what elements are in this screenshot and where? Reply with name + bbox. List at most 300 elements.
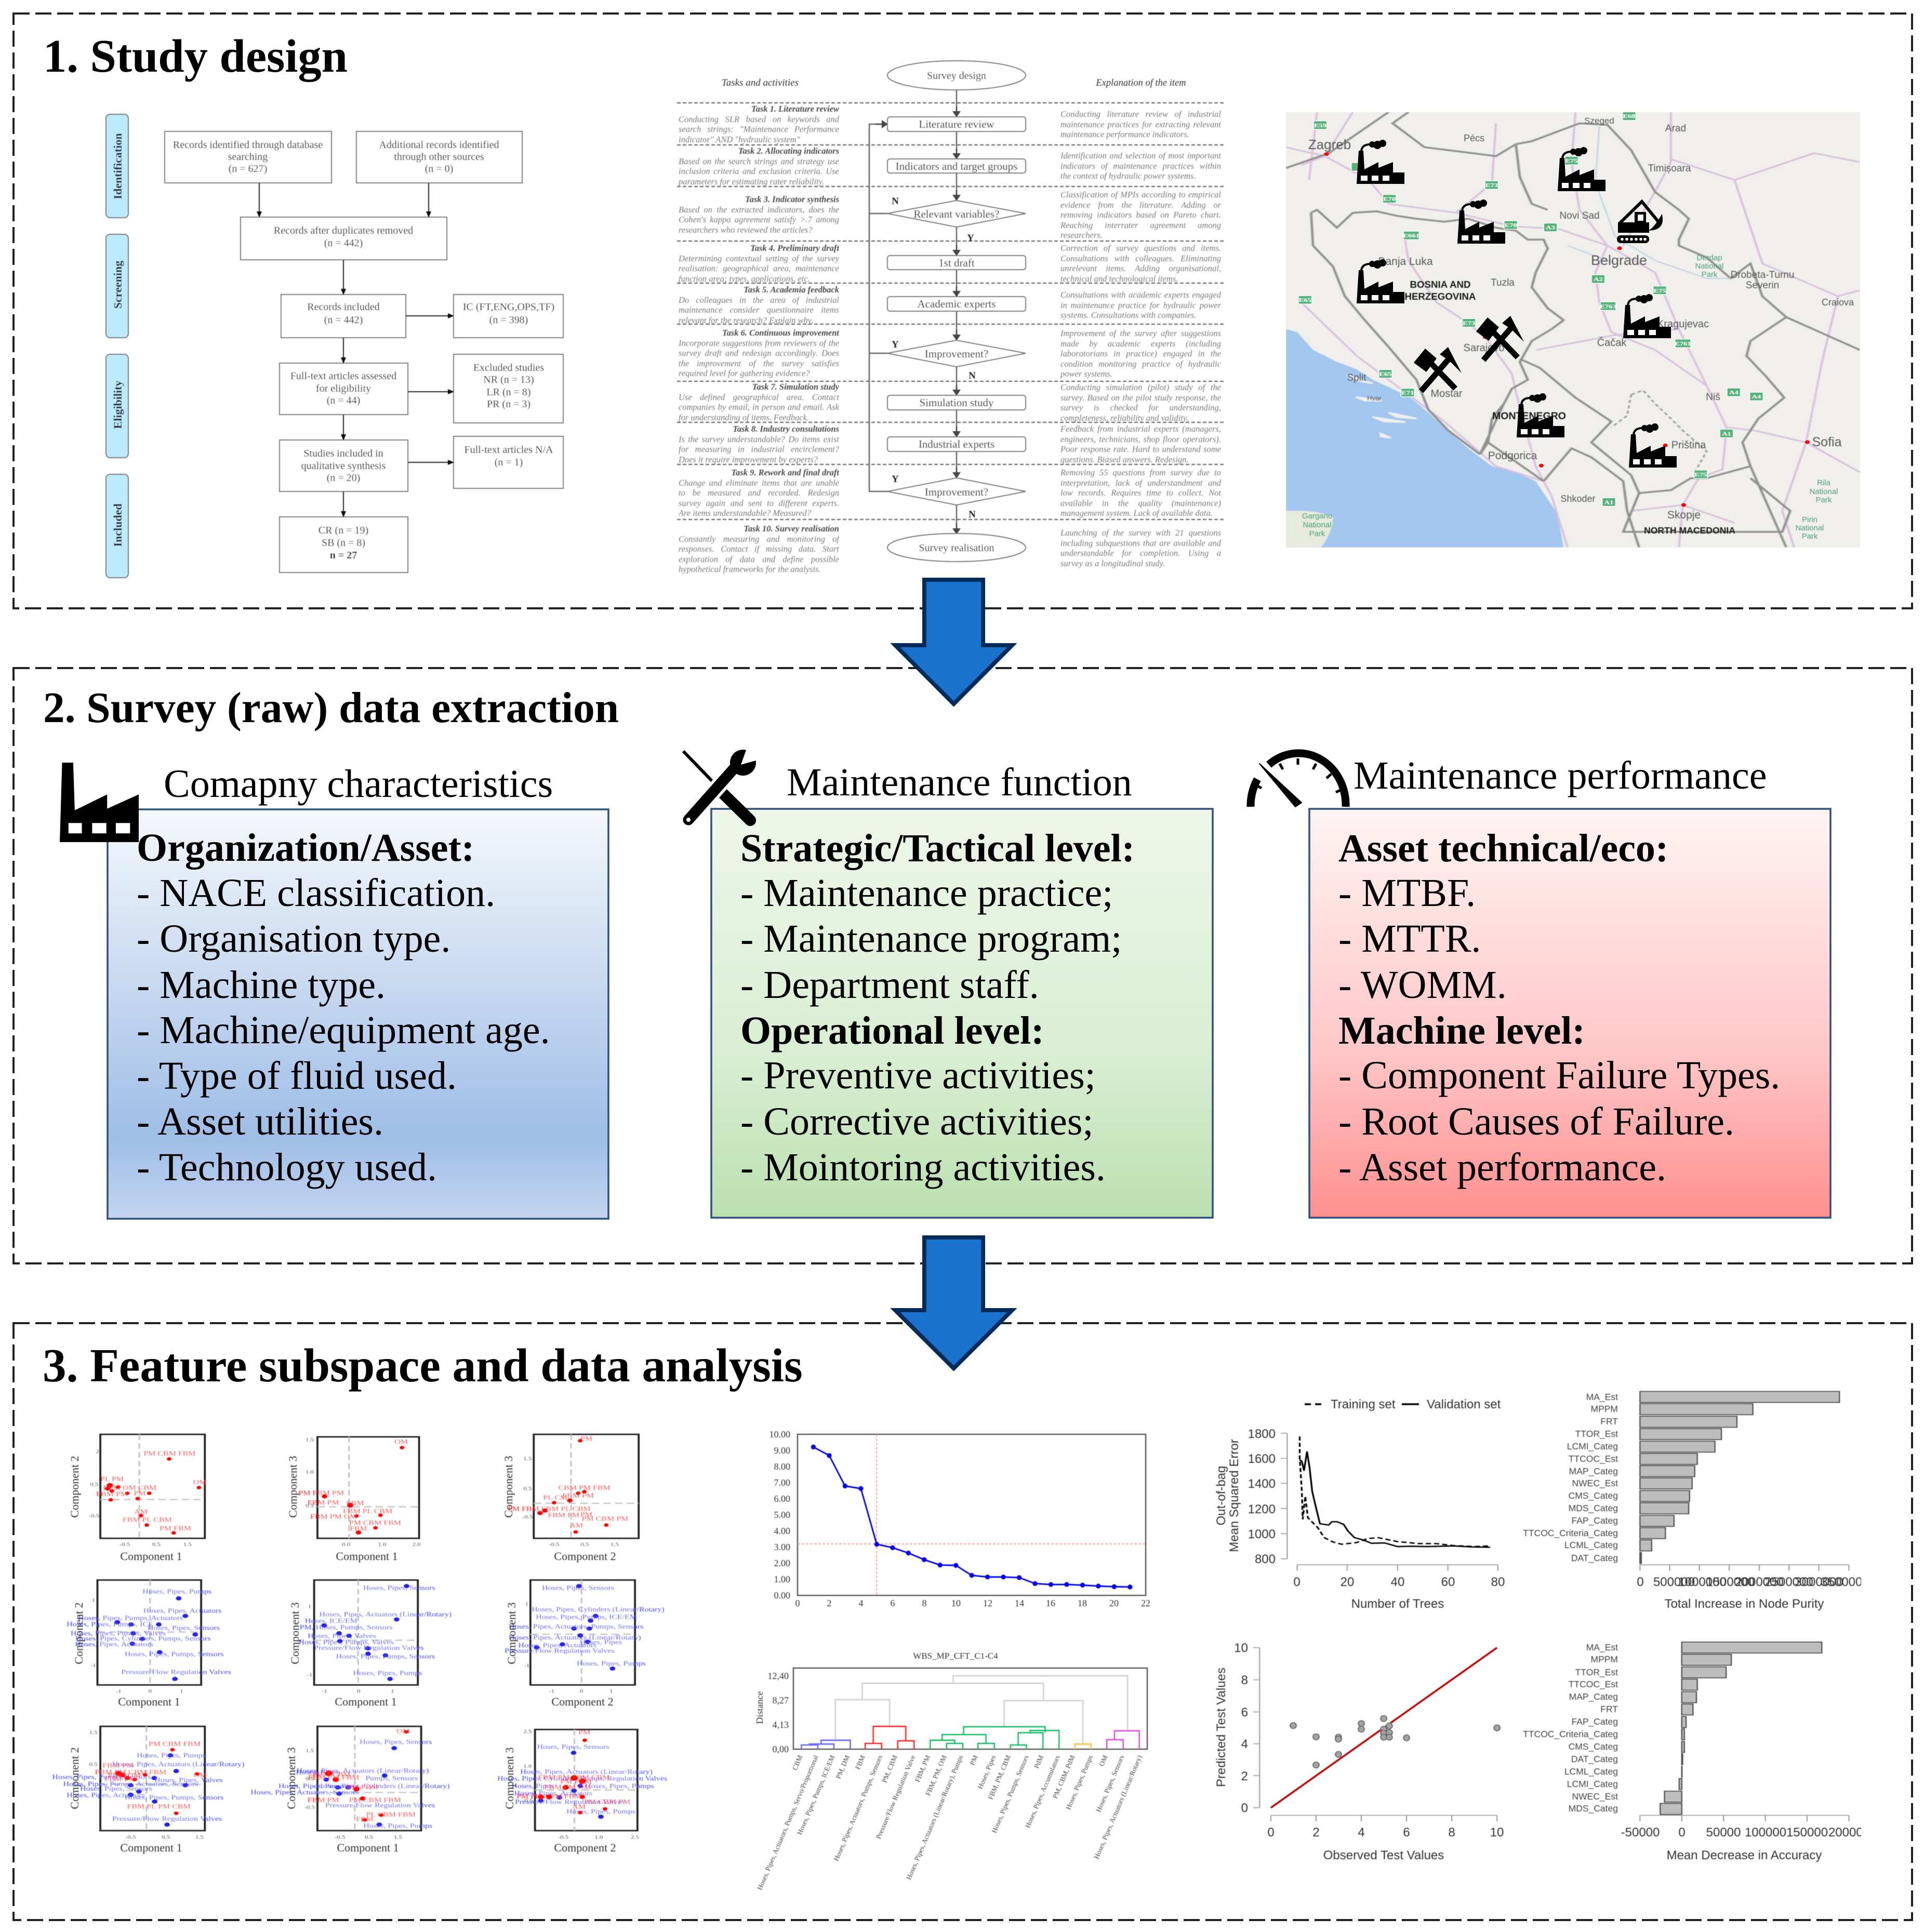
text: task 10: Constantly measuring and monitoring of	[679, 534, 839, 544]
arrows: flow connectors	[956, 90, 957, 534]
arrow: feedback loop	[869, 124, 887, 491]
chart: scree plot of eigenvalues: 2	[827, 1598, 831, 1608]
scatter plot: blue, component 1 vs 2: Hoses, Pipes, Sensors	[148, 1624, 220, 1632]
text: task 7	[679, 382, 839, 422]
axis labels: component titles: Component 2	[554, 1841, 616, 1854]
chart: scree plot of eigenvalues: 9.00	[774, 1445, 790, 1456]
node: Simulation study: Simulation study	[920, 396, 994, 409]
text: explanation 4: Correction of survey questions and items.	[1060, 243, 1221, 253]
scatter plot: blue, component 1 vs 2: Hoses, Pipes, Pumps, Valves	[71, 1630, 166, 1637]
legend: training and validation set	[1305, 1397, 1501, 1411]
chart: out-of-bag error line chart: 1600	[1248, 1452, 1276, 1466]
chart: observed versus predicted scatter plot: 6	[1241, 1706, 1248, 1720]
chart: observed versus predicted scatter plot: 0	[1241, 1801, 1248, 1815]
chart: total increase in node purity bar chart: MA_Est	[1586, 1392, 1618, 1403]
map: place names: MONTENEGRO	[1492, 410, 1566, 422]
text: task 2: Based on the search strings and strategy use	[679, 156, 839, 166]
dendrogram leaf labels: OM	[1097, 1754, 1109, 1767]
heading: 3. Feature subspace and data analysis: 3. Feature subspace and data analysis	[43, 1339, 803, 1392]
map: road signs: A3	[1546, 224, 1555, 231]
scatter plot: red, component 1 vs 3: FBM PL CBM	[343, 1508, 393, 1515]
node: Survey realisation: Survey realisation	[919, 542, 994, 554]
map: road signs	[1298, 112, 1763, 506]
scatter plot: red, component 2 vs 3: PM	[580, 1435, 593, 1443]
axis labels: component titles: Component 1	[335, 1695, 397, 1708]
scatter plot: blue, component 1 vs 2	[67, 1580, 231, 1694]
text: explanation 1: Conducting literature review of industrial	[1060, 109, 1221, 119]
chart: scree plot of eigenvalues: 3.00	[774, 1542, 790, 1552]
scatter plot: red, component 1 vs 2: PM FBM	[160, 1525, 191, 1532]
chart: mean decrease in accuracy bar chart: TTCOC_Est	[1569, 1679, 1618, 1690]
chart: scree plot of eigenvalues: 4.00	[774, 1526, 790, 1536]
list: organization and asset items: - Asset utilities.	[137, 1100, 383, 1143]
scatter plot: combined, component 1 vs 2: 0.5	[89, 1762, 98, 1767]
dendrogram leaf labels: Hoses, Pipes, Pumps, Sensors	[990, 1754, 1030, 1834]
scatter plot: blue, component 1 vs 2: Hoses, Pipes, Actuators	[75, 1641, 153, 1648]
heading: Maintenance function: Maintenance function	[787, 761, 1132, 804]
text: task 1: search strings: "Maintenance Performance	[679, 124, 839, 134]
scatter plot: combined, component 2 vs 3: AM	[572, 1804, 586, 1810]
column heading: Explanation of the item: Explanation of the item	[1095, 78, 1186, 88]
chart: observed versus predicted scatter plot: 10	[1234, 1641, 1248, 1655]
dendrogram leaf labels: CBM	[791, 1754, 804, 1771]
text: explanation 5: systems. Consultations with companies.	[1060, 310, 1197, 320]
chart: observed versus predicted scatter plot: Observed Test Values	[1323, 1848, 1444, 1862]
scatter plot: blue, component 2 vs 3: 1	[525, 1602, 528, 1607]
node: Academic experts	[887, 297, 1026, 311]
scatter plot: blue, component 1 vs 2: Hoses, Pipes, Actuators	[143, 1607, 221, 1615]
map: road signs: E763	[1600, 303, 1616, 310]
chart: total increase in node purity bar chart: TTOR_Est	[1575, 1429, 1618, 1440]
scatter plot: red, component 1 vs 2: OM	[193, 1479, 207, 1486]
list: strategic, tactical and operational items: - Maintenance program;	[740, 917, 1122, 961]
map: place names: Podgorica	[1488, 450, 1537, 462]
list: strategic, tactical and operational items: Operational level:	[740, 1009, 1044, 1052]
icon: excavator on map	[1617, 202, 1662, 243]
map: road signs: E65	[1299, 297, 1311, 303]
scatter plot: combined, component 2 vs 3: Hoses, Pipes, Actuators	[514, 1790, 592, 1797]
list: asset and machine level items: - Component Failure Types.	[1338, 1054, 1780, 1097]
list: asset and machine level items: Machine level:	[1338, 1009, 1585, 1052]
chart: observed versus predicted scatter plot: Predicted Test Values	[1214, 1668, 1228, 1787]
decision: Improvement?: Improvement?	[925, 348, 988, 360]
phase label: Eligibility	[106, 354, 128, 458]
map: road signs: E661	[1403, 233, 1419, 239]
scatter plot: red, component 1 vs 2	[89, 1434, 207, 1548]
dendrogram leaf labels: FBM	[854, 1754, 867, 1770]
text: explanation 9: interpretation, lack of understandment and	[1060, 478, 1221, 488]
scatter plot: combined, component 1 vs 3: -0.5	[304, 1805, 315, 1810]
dendrogram leaf labels: FBM, PM, CBM	[986, 1754, 1012, 1801]
scatter plot: combined, component 2 vs 3: Hoses, Pipes, Actuators (Linear/Rotary)	[520, 1768, 653, 1776]
map: place names: Park	[1702, 270, 1718, 279]
chart: mean decrease in accuracy bar chart: CMS_Categ	[1569, 1741, 1618, 1752]
node: Survey design	[887, 61, 1026, 90]
dendrogram leaf labels: Hoses, Pipes, Actuators (Linear/Rotary), Pumps	[905, 1754, 964, 1881]
chart: total increase in node purity bar chart: 0	[1637, 1575, 1644, 1589]
chart: out-of-bag error line chart: 1400	[1248, 1477, 1276, 1491]
scatter plot: red, component 2 vs 3: FBM PM	[562, 1493, 594, 1499]
text: explanation 9: low records. Requires time to collect. Not	[1060, 488, 1221, 498]
branch labels: Y and N	[892, 196, 976, 520]
map: place names	[1302, 116, 1854, 541]
map: road signs: E75	[1565, 158, 1578, 164]
text: explanation 7: Conducting simulation (pilot) study of the	[1060, 382, 1221, 392]
map: place names: Sofia	[1812, 435, 1842, 449]
list: organization and asset items: - NACE classification.	[137, 871, 495, 915]
text: task 1	[679, 104, 840, 144]
dendrogram leaf labels: PM, CBM, PdM	[1051, 1754, 1077, 1800]
chart: total increase in node purity bar chart: 3000000	[1795, 1575, 1843, 1589]
box: records after duplicates removed	[241, 217, 447, 260]
scatter plot: combined, component 2 vs 3: 1.0	[595, 1835, 603, 1840]
map: place names: Szeged	[1584, 116, 1614, 126]
scatter plot: blue, component 1 vs 2: 0	[149, 1689, 152, 1694]
node: Indicators and target groups: Indicators and target groups	[896, 160, 1017, 172]
chart: out-of-bag error line chart: 0	[1293, 1575, 1301, 1589]
scatter plot: combined, component 1 vs 2: Hoses, Pipes, Actuators (Linear/Rotary)	[112, 1761, 245, 1768]
node: Literature review	[887, 117, 1026, 131]
text: explanation 3: Classification of MPIs according to empirical	[1060, 190, 1221, 199]
axis labels: component titles: Component 1	[120, 1550, 182, 1563]
arrows: flow connectors	[259, 183, 454, 517]
box: included totals: n = 27	[330, 550, 357, 561]
box: excluded studies: Excluded studies	[473, 362, 544, 374]
scatter plot: combined, component 2 vs 3: 2.5	[523, 1729, 532, 1735]
scatter plot: red, component 1 vs 2: PL PM	[100, 1476, 124, 1483]
text: explanation 5: Consultations with academic experts engaged	[1060, 290, 1221, 300]
chart: scree plot of eigenvalues	[769, 1429, 1150, 1608]
scatter plot: red, component 2 vs 3: 1.5	[523, 1456, 532, 1461]
scatter plot: combined, component 1 vs 2: 0.5	[162, 1835, 170, 1840]
heading: Comapny characteristics: Comapny characteristics	[164, 762, 553, 806]
text: task 5	[679, 285, 840, 325]
text: task 8: Is the survey understandable? Do items exist	[679, 434, 839, 444]
text: explanation 3: evidence from the literature. Adding or	[1060, 200, 1221, 210]
text: explanation 7: completeness, reliability and validity.	[1060, 413, 1188, 423]
scatter plot: blue, component 1 vs 3: Pressure/Flow Regulation Valves	[314, 1645, 424, 1652]
list: asset and machine level items: - MTTR.	[1338, 917, 1481, 961]
scatter plot: blue, component 1 vs 2: Hoses, Pipes, Pumps	[142, 1588, 211, 1595]
chart: scree plot of eigenvalues: 16	[1046, 1598, 1055, 1608]
box: records identified through database	[165, 131, 331, 183]
chart: total increase in node purity bar chart: LCMI_Categ	[1567, 1441, 1618, 1452]
scatter plot: red, component 2 vs 3: AM	[570, 1522, 583, 1529]
box: full-text articles assessed: Full-text articles assessed	[290, 370, 396, 382]
chart: total increase in node purity bar chart: 500000	[1653, 1575, 1695, 1589]
scatter plot: combined, component 1 vs 3: 1.5	[306, 1748, 314, 1754]
scatter plot: combined, component 1 vs 2: Hoses, Pipes, Actuators	[67, 1792, 145, 1799]
box: included totals: CR (n = 19)	[319, 525, 368, 536]
chart: mean decrease in accuracy bar chart: 100000	[1745, 1826, 1786, 1840]
text: task 4: function area; types, applications, etc.	[679, 274, 810, 284]
node: Simulation study	[887, 395, 1026, 410]
scatter plot: blue, component 1 vs 3: Hoses, Pipes, Pumps	[353, 1670, 422, 1677]
chart: total increase in node purity bar chart: 2500000	[1764, 1575, 1813, 1589]
text: explanation 10	[1060, 528, 1221, 568]
scatter plot: red, component 2 vs 3: 1.5	[611, 1542, 619, 1548]
scatter plot: combined, component 1 vs 3: OM	[396, 1728, 410, 1735]
map: road signs: E65	[1379, 371, 1392, 377]
scatter plot: blue, component 1 vs 2: -1	[116, 1689, 122, 1694]
scatter plot: red, component 1 vs 2: FBM PM	[96, 1491, 128, 1498]
scatter plot: blue, component 2 vs 3: -1	[524, 1663, 529, 1668]
chart: scree plot of eigenvalues: 14	[1015, 1598, 1024, 1608]
text: task 8: Does it require improvement by experts?	[679, 455, 818, 464]
scatter plot: red, component 2 vs 3: PL CM	[543, 1495, 568, 1502]
scatter plot: blue, component 2 vs 3: Hoses, Pipes, Actuators	[519, 1642, 596, 1649]
chart: total increase in node purity bar chart: 3500000	[1821, 1575, 1869, 1589]
map: place names: Arad	[1665, 123, 1686, 134]
scatter plot: combined, component 1 vs 2: FBM PM CBM FBM	[95, 1769, 167, 1776]
scatter plot: blue, component 2 vs 3: -1	[549, 1689, 554, 1694]
scatter plot: red, component 1 vs 2: 0.5	[90, 1482, 99, 1487]
chart: scree plot of eigenvalues: 20	[1109, 1598, 1119, 1608]
map: road signs: A4	[1729, 390, 1739, 396]
chart: observed versus predicted scatter plot: 2	[1312, 1826, 1320, 1840]
chart: out-of-bag error line chart: 60	[1441, 1575, 1455, 1589]
scatter plot: combined, component 1 vs 2: Hoses, Pipes, Pumps, Sensors	[52, 1774, 151, 1781]
scatter plot: blue, component 1 vs 2: Hoses, Pipes, Pumps, Actuators	[78, 1615, 183, 1622]
axis labels: component titles: Component 1	[336, 1550, 398, 1563]
decision: Improvement? second: Improvement?	[925, 486, 988, 498]
list: organization and asset items	[137, 826, 550, 1189]
chart: out-of-bag error line chart	[1214, 1397, 1505, 1611]
dendrogram leaf labels: Hoses, Pipes, Pumps, ICE/EM	[795, 1754, 836, 1836]
map: road signs: A1	[1604, 499, 1613, 505]
text: explanation 4: technical and technological items.	[1060, 274, 1178, 284]
text: explanation 10: understandable for completion. Using a	[1060, 548, 1221, 558]
box: excluded studies	[454, 354, 563, 423]
scatter plot: red, component 1 vs 3: OM	[394, 1438, 408, 1446]
scatter plot: blue, component 2 vs 3: Pressure/Flow Regulation Valves	[505, 1647, 615, 1655]
scatter plot: red, component 1 vs 2: FBM PL CBM	[123, 1516, 172, 1524]
scatter plot: red, component 1 vs 3: FBM	[350, 1525, 367, 1533]
panel: survey raw data extraction	[14, 668, 1912, 1263]
scatter plot: red, component 1 vs 3: PM CBM FBM	[349, 1520, 401, 1527]
list: asset and machine level items: Asset technical/eco:	[1338, 827, 1668, 870]
map: place names: Derdap	[1696, 254, 1722, 262]
chart: total increase in node purity bar chart: CMS_Categ	[1569, 1490, 1618, 1501]
chart: total increase in node purity bar chart: 1500000	[1706, 1575, 1755, 1589]
scatter plot: combined, component 1 vs 2: Hoses, Pipes, Valves	[154, 1777, 223, 1784]
dendrogram leaf labels: Hoses, Pipes, Actuators, Pumps, Sensors	[832, 1754, 884, 1862]
axis labels: component titles: Component 3	[505, 1602, 518, 1664]
list: organization and asset items: - Machine/equipment age.	[137, 1008, 550, 1052]
text: explanation 2	[1060, 151, 1221, 181]
text: task 6: the improvement of the survey satisfies	[679, 358, 839, 368]
text: explanation 5: in maintenance practice for hydraulic power	[1060, 300, 1221, 310]
list: organization and asset items: Organization/Asset:	[137, 826, 474, 870]
chart: scree plot of eigenvalues: 7.00	[774, 1477, 790, 1488]
scatter plot: blue, component 2 vs 3	[505, 1580, 665, 1694]
scatter plot: combined, component 1 vs 3: Hoses, Pipes, Sensors	[360, 1739, 432, 1746]
text: task 9: survey again and sent to different experts.	[679, 498, 839, 508]
scatter plot: combined, component 1 vs 3: FBM CBM	[313, 1771, 351, 1778]
box: records identified through database: searching	[228, 151, 268, 163]
text: task 9: Are items understandable? Measured?	[679, 508, 811, 518]
chart: dendrogram WBS_MP_CFT_C1-C4: WBS_MP_CFT_C1-C4	[913, 1651, 998, 1661]
scatter plot: blue, component 1 vs 2: Hoses, Pipes, Pumps, Sensors	[125, 1651, 223, 1658]
map: place names: Pécs	[1464, 133, 1484, 143]
chart: dendrogram WBS_MP_CFT_C1-C4: 0,00	[772, 1744, 789, 1754]
map: place names: Park	[1816, 496, 1832, 504]
text: explanation 8: questions. Biased answers. Redesign.	[1060, 455, 1189, 464]
text: explanation 4	[1060, 243, 1221, 284]
scatter plot: combined, component 1 vs 2: Hoses, Pipes, Pumps	[137, 1752, 206, 1760]
icons: crossed hammers on map	[1414, 316, 1524, 391]
scatter plot: blue, component 2 vs 3: 0	[580, 1689, 583, 1694]
chart: observed versus predicted scatter plot: 10	[1490, 1826, 1504, 1840]
chart: scree plot of eigenvalues: 5.00	[774, 1510, 790, 1520]
scatter plot: blue, component 1 vs 2: 1	[180, 1689, 183, 1694]
scatter plot: combined, component 1 vs 3: -0.5	[335, 1835, 346, 1840]
decision: Improvement?	[887, 340, 1026, 367]
box: excluded studies: LR (n = 8)	[486, 387, 531, 398]
scatter plot: combined, component 1 vs 3: Pumps, Sensors	[365, 1775, 418, 1782]
text: task 6: required level for gathering evidence?	[679, 368, 810, 378]
branch labels: Y and N: N	[968, 370, 976, 381]
scatter plot: blue, component 2 vs 3: 1	[609, 1689, 613, 1694]
scatter plot: combined, component 1 vs 3: PL CBM FBM	[366, 1811, 416, 1819]
axis labels: component titles: Component 1	[337, 1841, 399, 1854]
scatter plot: red, component 2 vs 3	[508, 1434, 639, 1548]
scatter plot: blue, component 2 vs 3: Hoses, Pipes, Sensors	[542, 1584, 614, 1592]
chart: total increase in node purity bar chart: LCML_Categ	[1564, 1540, 1618, 1551]
chart: mean decrease in accuracy bar chart: MAP_Categ	[1569, 1691, 1618, 1702]
map: place names: Pirin	[1802, 515, 1817, 524]
scatter plot: combined, component 2 vs 3: 1.0	[523, 1764, 532, 1769]
map: place names: National	[1809, 487, 1838, 496]
scatter plot: red, component 1 vs 3: FBM	[347, 1500, 364, 1507]
box: studies in qualitative synthesis: qualitative synthesis	[301, 460, 386, 472]
box: excluded studies: NR (n = 13)	[483, 374, 534, 385]
axis labels: component titles: Component 2	[68, 1747, 81, 1809]
branch labels: Y and N: N	[968, 509, 976, 520]
chart: mean decrease in accuracy bar chart: FAP_Categ	[1571, 1716, 1618, 1727]
box: studies in qualitative synthesis: Studies included in	[303, 448, 383, 459]
text: task 4: realisation: geographical area, maintenance	[679, 263, 839, 273]
chart: total increase in node purity bar chart: 1000000	[1678, 1575, 1727, 1589]
map: place names: Shkoder	[1560, 494, 1596, 504]
scatter plot: combined, component 2 vs 3: -0.5	[522, 1798, 533, 1804]
chart: PRISMA flow diagram	[106, 114, 563, 578]
dendrogram leaf labels: Hoses, Pipes	[976, 1754, 997, 1790]
phase label: Screening	[106, 234, 128, 338]
text: task 7: Use defined geographical area. Contact	[679, 392, 839, 402]
icon: factory	[60, 763, 139, 842]
map: place names: Sarajevo	[1464, 342, 1504, 354]
scatter plot: red, component 2 vs 3: 0.5	[580, 1542, 589, 1548]
chart: scree plot of eigenvalues: 6	[891, 1598, 895, 1608]
map: road signs: A4	[1752, 394, 1761, 400]
dendrogram leaf labels: PM, DM	[834, 1754, 851, 1780]
chart: scree plot of eigenvalues: 6.00	[774, 1494, 790, 1504]
box: IC exclusions: (n = 398)	[489, 314, 528, 326]
node: Industrial experts: Industrial experts	[919, 438, 994, 450]
phase label: Screening: Screening	[111, 261, 124, 309]
icon: wrench and screwdriver	[683, 747, 760, 822]
map: place names: Park	[1802, 532, 1818, 541]
decision: Improvement? second	[887, 478, 1026, 505]
text: task 9: Change and eliminate items that are unable	[679, 478, 839, 488]
text: explanation 7: survey is checked for understanding,	[1060, 403, 1221, 412]
text: explanation 8	[1060, 424, 1221, 464]
map: place names: NORTH MACEDONIA	[1644, 525, 1735, 536]
text: task 8	[679, 424, 839, 464]
chart: mean decrease in accuracy bar chart: NWEC_Est	[1572, 1791, 1618, 1802]
node: Survey realisation	[887, 534, 1026, 562]
map: place names: Niš	[1706, 392, 1720, 403]
scatter plot: blue, component 1 vs 3: 0	[357, 1689, 361, 1694]
scatter plot: red, component 1 vs 2: -0.5	[120, 1542, 130, 1548]
scatter plot: blue, component 1 vs 2: Pressure/Flow Regulation Valves	[121, 1669, 231, 1676]
dendrogram leaf labels: Hoses, Pipes, Pumps	[1064, 1754, 1094, 1811]
chart: out-of-bag error line chart: 80	[1491, 1575, 1505, 1589]
scatter plot: blue, component 1 vs 3: Hoses, Pipes, Actuators (Linear/Rotary)	[320, 1611, 452, 1618]
chart: mean decrease in accuracy bar chart: TTCOC_Criteria_Categ	[1523, 1729, 1618, 1740]
map: place names: National	[1303, 521, 1332, 529]
scatter plot: combined, component 1 vs 3: Hoses, Pipes, Pumps	[278, 1783, 348, 1790]
box: full-text articles N/A: Full-text articles N/A	[464, 444, 553, 456]
scatter plot: combined, component 2 vs 3: Hoses, Pipes, Cylinders, Pumps, Regulation Valves	[497, 1775, 667, 1782]
chart: out-of-bag error line chart: 20	[1341, 1575, 1354, 1589]
scatter plot: red, component 1 vs 2: PM	[134, 1490, 146, 1497]
box: additional records	[356, 131, 522, 183]
map: place names: BOSNIA AND	[1410, 279, 1470, 290]
chart: total increase in node purity bar chart: MPPM	[1591, 1404, 1618, 1414]
chart: out-of-bag error line chart: Number of Trees	[1351, 1597, 1444, 1611]
map: road signs: E71	[1401, 390, 1414, 396]
text: explanation 10: Launching of the survey with 21 questions	[1060, 528, 1221, 538]
chart: mean decrease in accuracy bar chart: 0	[1678, 1826, 1686, 1840]
panel: feature subspace and data analysis	[14, 1323, 1912, 1920]
scatter plot: combined, component 2 vs 3: PM CBM PM	[584, 1798, 631, 1806]
arrow: study design to survey extraction	[883, 571, 1024, 714]
box: records after duplicates removed: Records after duplicates removed	[274, 225, 413, 236]
map: place names: Timișoara	[1648, 163, 1691, 174]
scatter plot: blue, component 1 vs 3: Hoses, ICE/EM	[305, 1618, 357, 1624]
text: explanation 2: indicators of maintenance practices within	[1060, 161, 1221, 171]
text: explanation 5	[1060, 290, 1221, 321]
phase label: Included	[106, 474, 128, 578]
chart: scree plot of eigenvalues: 12	[983, 1598, 992, 1608]
node: Academic experts: Academic experts	[917, 298, 996, 310]
scatter plot: red, component 2 vs 3: PM FBM FBM PL CBM	[508, 1505, 591, 1513]
scatter plot: blue, component 2 vs 3: Hoses, Pipes, Actuators (Linear/Rotary)	[509, 1634, 641, 1642]
text: task 3: researchers who reviewed the articles?	[679, 225, 813, 235]
branch labels: Y and N: Y	[892, 474, 899, 485]
list: strategic, tactical and operational items: - Department staff.	[740, 963, 1039, 1007]
legend: training and validation set: Validation set	[1427, 1397, 1501, 1411]
chart: scree plot of eigenvalues: 18	[1078, 1598, 1087, 1608]
text: task 3: Cohen's kappa agreement satisfy >.7 among	[679, 215, 839, 224]
map: place names: Gargano	[1302, 512, 1332, 521]
scatter plot: combined, component 1 vs 3: Hoses, Pipes, Cylinders (Linear/Rotary)	[317, 1783, 450, 1790]
phase label: Identification: Identification	[111, 133, 124, 199]
axis labels: component titles: Component 1	[118, 1695, 180, 1708]
map: place names: Drobeta-Turnu	[1731, 270, 1794, 281]
chart: total increase in node purity bar chart: FAP_Categ	[1571, 1515, 1618, 1526]
list: organization and asset items: - Organisation type.	[137, 917, 450, 961]
list: asset and machine level items	[1338, 827, 1780, 1189]
scatter plot: red, component 1 vs 3: FBM PM OM	[310, 1513, 357, 1521]
scatter plot: combined, component 1 vs 2: Hoses, Pipes, Pumps, Actuators, Sensors	[63, 1780, 198, 1788]
scatter plot: red, component 1 vs 2: 2	[96, 1449, 99, 1454]
text: explanation 3	[1060, 190, 1221, 241]
scatter plot: red, component 1 vs 3: 1.0	[306, 1470, 314, 1475]
chart: observed versus predicted scatter plot: 8	[1448, 1826, 1455, 1840]
